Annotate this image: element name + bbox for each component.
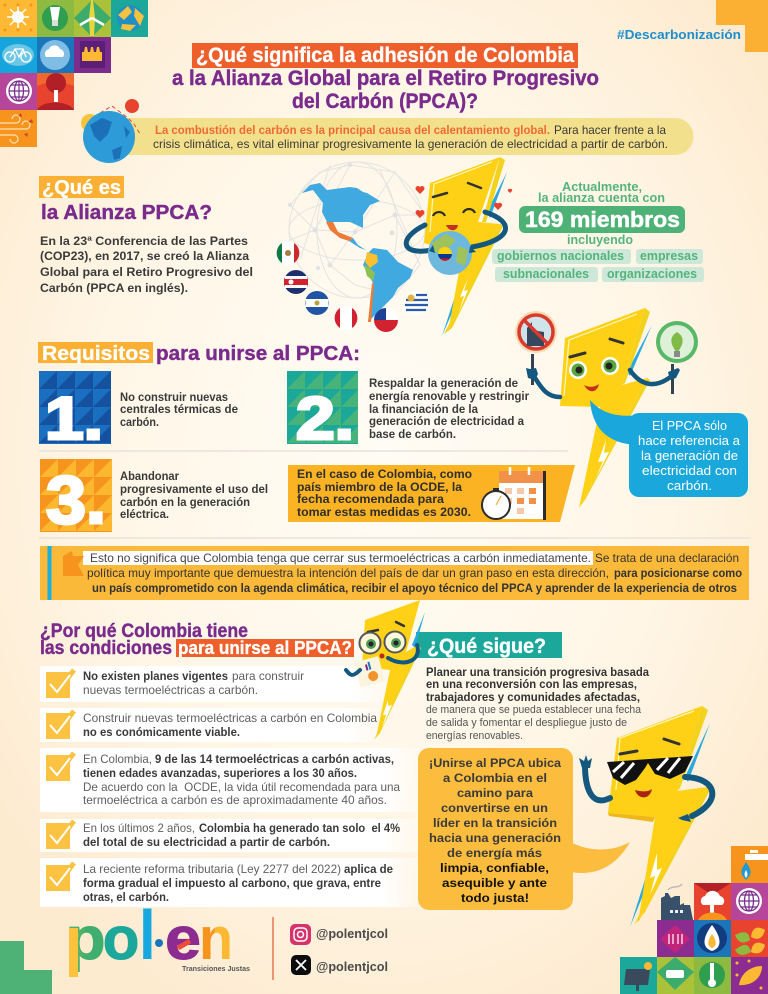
logo: pol·en Transiciones Justas: p [66, 905, 106, 972]
icon: flag Uruguay [404, 291, 428, 315]
requirement 2: base de carbón. [369, 427, 456, 441]
row 5: aplica de [344, 862, 393, 876]
row 2: no es conómicamente viable. [83, 725, 240, 739]
requirement 3: carbón en la generación [120, 495, 250, 509]
row 2: Construir nuevas termoeléctricas a carbón en Colombia [83, 711, 377, 725]
text: next steps: en una reconversión con las empresas, [426, 677, 637, 691]
members count: la alianza cuenta con [538, 190, 665, 205]
callout: Colombia 2030: fecha recomendada para [297, 492, 444, 506]
logo: pol·en Transiciones Justas: Transiciones Justas [182, 966, 250, 973]
row 5: forma gradual el impuesto al carbono, que grava, entre [83, 876, 381, 890]
callout: Unirse al PPCA: limpia, confiable, [440, 861, 549, 875]
title: ¿Qué significa la adhesión de Colombia [196, 44, 574, 67]
callout: Unirse al PPCA: líder en la transición [433, 816, 557, 830]
icon: flag Costa Rica [284, 270, 308, 294]
callout: PPCA only refers to electricity: hace referencia a [638, 433, 741, 448]
logo: pol·en Transiciones Justas: n [199, 905, 233, 972]
text: PPCA description: En la 23ª Conferencia de las Partes [40, 234, 248, 248]
icon: calendar and clock [482, 467, 546, 520]
row 4: Colombia ha generado tan solo el 4% [199, 821, 400, 835]
callout: PPCA only refers to electricity: la generación de [641, 448, 738, 463]
checklist rows [40, 666, 420, 907]
row 3: 9 de las 14 termoeléctricas a carbón activas, [155, 752, 394, 766]
row 4: del total de su electricidad a partir de carbón. [83, 835, 330, 849]
callout: Unirse al PPCA: ¡Unirse al PPCA ubica [429, 756, 561, 770]
heading: ¿Qué sigue?: ¿Qué sigue? [427, 635, 546, 658]
quote banner: Esto no significa que Colombia tenga que cerrar sus termoeléctricas a carbón inmediatamente. [90, 551, 591, 565]
callout: Unirse al PPCA: convertirse en un [441, 801, 548, 815]
callout: Unirse al PPCA [418, 748, 630, 910]
title: del Carbón (PPCA)? [292, 90, 478, 113]
callout: Unirse al PPCA: hacia una generación [429, 831, 561, 845]
quote banner: para posicionarse como [614, 566, 742, 580]
social: x: @polentjcol [316, 959, 388, 974]
icon: flag Peru [334, 306, 358, 330]
row 4: En los últimos 2 años, [83, 821, 195, 835]
row 1 [40, 666, 385, 702]
row 5: otras, el carbón. [83, 890, 169, 904]
requirement 1: carbón. [120, 415, 159, 429]
intro banner: Para hacer frente a la [554, 123, 666, 137]
members count: empresas [640, 249, 698, 263]
callout: Unirse al PPCA: camino para [457, 786, 533, 800]
row 3: De acuerdo con la OCDE, la vida útil recomendada para una [83, 780, 400, 794]
members count: subnacionales [503, 267, 589, 281]
row 1: No existen planes vigentes [83, 669, 228, 683]
row 3: termoeléctrica a carbón es de aproximadamente 40 años. [83, 793, 387, 807]
icon: flag Chile [374, 308, 398, 332]
social: x [291, 955, 388, 975]
social: instagram: @polentjcol [316, 926, 388, 941]
text: PPCA description: Carbón (PPCA en inglés). [40, 281, 188, 295]
row 2 [40, 708, 380, 742]
logo: pol·en Transiciones Justas: l [139, 896, 156, 974]
quote banner: Se trata de una declaración [595, 551, 739, 565]
row 1: nuevas termoeléctricas a carbón. [83, 683, 258, 697]
quote banner: un país comprometido con la agenda climática, recibir el apoyo técnico del PPCA y aprender de la experiencia de otros [92, 581, 737, 595]
callout: Colombia 2030: país miembro de la OCDE, la [297, 480, 462, 494]
callout: PPCA only refers to electricity: carbón. [667, 478, 712, 493]
text: next steps: de salida y fomentar el despliegue justo de [426, 717, 627, 729]
requirement 2: Respaldar la generación de [369, 376, 518, 390]
social: instagram [290, 924, 388, 945]
heading: ¿Qué es la Alianza PPCA?: la Alianza PPCA? [41, 202, 212, 224]
requirement 1: No construir nuevas [120, 390, 228, 404]
icon: green bulb sign [656, 321, 698, 394]
icon: flag El Salvador [305, 291, 329, 315]
requirement 2: energía renovable y restringir [369, 389, 529, 403]
quote banner: política muy importante que demuestra la intención del país de dar un gran paso en esta dirección, [87, 566, 609, 580]
logo: pol·en Transiciones Justas [66, 896, 250, 977]
icon: flag Mexico [276, 241, 300, 265]
members count: gobiernos nacionales [497, 249, 624, 263]
tile mosaic: top left [0, 0, 148, 147]
callout: Unirse al PPCA: todo justa! [461, 891, 529, 905]
heading: Requisitos: Requisitos [42, 343, 150, 365]
callout: Unirse al PPCA: a Colombia en el [443, 771, 547, 785]
row 3 [40, 748, 420, 812]
callout: PPCA only refers to electricity [590, 400, 748, 497]
callout: Colombia 2030 [288, 465, 575, 522]
callout: Colombia 2030: tomar estas medidas es 2030. [297, 505, 471, 519]
logo: pol·en Transiciones Justas: o [103, 905, 139, 972]
row 1: para construir [232, 669, 304, 683]
title: a la Alianza Global para el Retiro Progresivo [172, 67, 599, 90]
text: PPCA description: (COP23), en 2017, se creó la Alianza [40, 249, 249, 263]
tile mosaic: bottom right [620, 846, 768, 994]
mascot: lightning with sunglasses [579, 706, 712, 927]
requirement 3 [40, 459, 268, 538]
heading: ¿Qué es la Alianza PPCA? [39, 176, 212, 224]
requirement 3: Abandonar [120, 469, 179, 483]
mascot: lightning with signs [515, 308, 698, 508]
decorative corner: top right [716, 0, 768, 52]
text: next steps: trabajadores y comunidades afectadas, [426, 690, 640, 704]
icon: quote mark [63, 551, 84, 576]
members count: incluyendo [567, 232, 633, 247]
requirement 3: eléctrica. [120, 507, 169, 521]
badge: 169 miembros: 169 miembros [525, 207, 680, 232]
mascot: lightning with glasses [346, 600, 425, 740]
heading: Requisitos [38, 342, 360, 365]
text: next steps: Planear una transición progresiva basada [426, 665, 649, 679]
icon: warming globe [81, 99, 140, 163]
requirement 1: centrales térmicas de [120, 402, 238, 416]
text: PPCA description [40, 234, 253, 295]
text: next steps [426, 665, 649, 742]
requirement 2: la financiación de la [369, 402, 478, 416]
heading: ¿Por qué Colombia tiene las condiciones?: las condiciones [40, 638, 172, 659]
members count: organizaciones [607, 267, 697, 281]
row 5 [40, 858, 420, 907]
requirement 2 [287, 371, 529, 452]
logo: pol·en Transiciones Justas: e [165, 905, 201, 972]
callout: Unirse al PPCA: asequible y ante [442, 876, 547, 890]
callout: PPCA only refers to electricity: electricidad con [642, 463, 737, 478]
icon: no coal plant sign [515, 311, 557, 385]
heading: ¿Por qué Colombia tiene las condiciones?: ¿Por qué Colombia tiene [40, 621, 248, 642]
text: next steps: energías renovables. [426, 730, 523, 742]
requirement 1 [39, 371, 238, 452]
requirement 3: progresivamente el uso del [120, 482, 268, 496]
heading: Requisitos: para unirse al PPCA: [156, 343, 360, 365]
mascot: lightning hugging the globe [406, 157, 512, 336]
heading: ¿Por qué Colombia tiene las condiciones?: para unirse al PPCA? [178, 638, 352, 658]
members count: Actualmente, [562, 179, 642, 194]
requirement 3: 3. [46, 462, 106, 538]
heading: ¿Qué es la Alianza PPCA?: ¿Qué es [42, 177, 121, 199]
heading: ¿Por qué Colombia tiene las condiciones? [40, 621, 354, 659]
hashtag: #Descarbonización [617, 28, 741, 42]
row 3: En Colombia, [83, 752, 152, 766]
text: PPCA description: Global para el Retiro Progresivo del [40, 265, 253, 279]
callout: Colombia 2030: En el caso de Colombia, como [297, 467, 472, 481]
requirement 1: 1. [45, 385, 103, 452]
decorative corner: bottom left [0, 941, 52, 994]
callout: PPCA only refers to electricity: El PPCA sólo [652, 418, 727, 433]
row 3: tienen edades avanzadas, superiores a los 30 años. [83, 766, 357, 780]
text: next steps: de manera que se pueda establecer una fecha [426, 704, 642, 716]
row 5: La reciente reforma tributaria (Ley 2277 del 2022) [83, 862, 341, 876]
map of the Americas with network globe and flags [276, 162, 428, 332]
requirement 2: generación de electricidad a [369, 414, 524, 428]
title [172, 43, 599, 113]
intro banner: crisis climática, es vital eliminar progresivamente la generación de electricidad a partir de carbón. [153, 137, 668, 151]
row 4 [40, 819, 420, 852]
intro banner [120, 118, 694, 155]
intro banner: La combustión del carbón es la principal causa del calentamiento global. [155, 123, 550, 137]
requirement 2: 2. [296, 385, 354, 452]
quote banner [40, 546, 749, 600]
callout: Unirse al PPCA: de energía más [447, 846, 542, 860]
members count [492, 179, 704, 282]
